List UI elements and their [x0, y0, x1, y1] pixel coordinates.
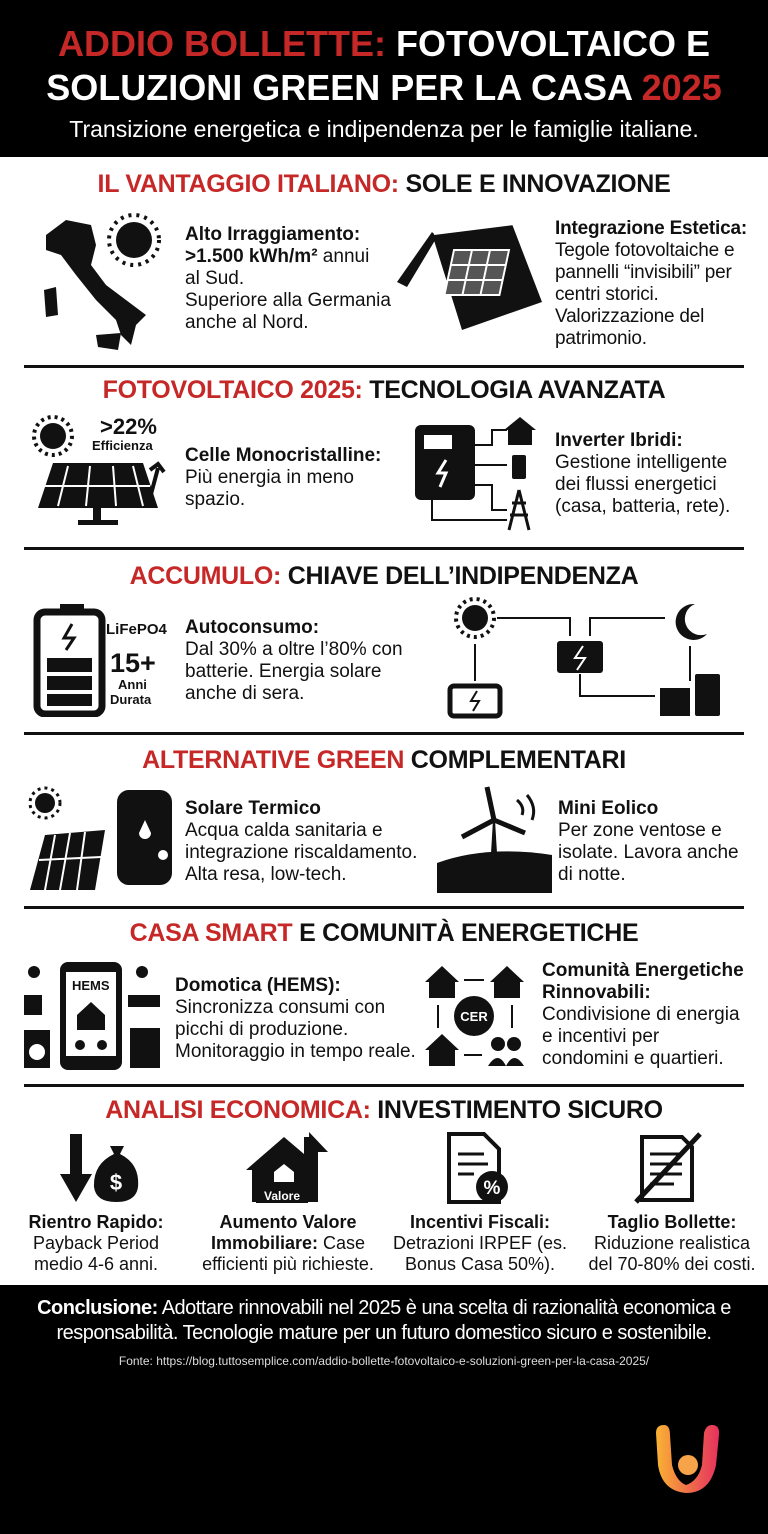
- text: comunita energetiche: Condivisione di energia: [542, 1004, 740, 1025]
- text: inverter ibridi: (casa, batteria, rete).: [555, 496, 730, 517]
- text: autoconsumo: Dal 30% a oltre l’80% con: [185, 639, 403, 660]
- text: integrazione estetica: patrimonio.: [555, 328, 647, 349]
- economic item: valore immobiliare: [202, 1132, 374, 1274]
- text: del 70-80% dei costi.: [588, 1254, 756, 1274]
- text: inverter ibridi: dei flussi energetici: [555, 474, 717, 495]
- logo: [656, 1425, 720, 1493]
- economic item: incentivi fiscali: [393, 1132, 567, 1274]
- text: [202, 1212, 374, 1274]
- text: comunita energetiche: [542, 960, 744, 1069]
- text: Immobiliare: Case: [211, 1233, 365, 1253]
- text: Detrazioni IRPEF (es.: [393, 1233, 567, 1253]
- header: [0, 0, 768, 157]
- icon: solar panel efficiency: >22%: [100, 414, 157, 439]
- icon: house value: [246, 1132, 328, 1203]
- text: comunita energetiche: e incentivi per: [542, 1026, 659, 1047]
- title: ADDIO BOLLETTE: FOTOVOLTAICO E: [58, 23, 710, 64]
- economic item: taglio bollette: [588, 1132, 756, 1274]
- economic item: rientro rapido: [28, 1134, 164, 1274]
- conclusion text: Conclusione: Adottare rinnovabili nel 2025 è una scelta di razionalità economica e responsabilità. Tecnologie mature per un futuro domestico sicuro e sostenibile.: [37, 1297, 731, 1344]
- text: mini eolico: [558, 798, 739, 885]
- icon: smart home phone: HEMS: [72, 978, 110, 993]
- text: domotica: Sincronizza consumi con: [175, 997, 385, 1018]
- icon: smart home phone: [24, 962, 160, 1070]
- text: integrazione estetica: [555, 218, 747, 349]
- icon: CER community: [425, 966, 524, 1066]
- icon: solar thermal: [28, 786, 172, 890]
- text: integrazione estetica: Integrazione Estetica:: [555, 218, 747, 239]
- icon: document percent: [447, 1132, 508, 1204]
- icon: crossed bill: [634, 1132, 702, 1204]
- icon: battery lifepo4: 15+: [110, 648, 156, 678]
- icon: house value: Valore: [264, 1189, 300, 1203]
- text: Taglio Bollette:: [608, 1212, 736, 1232]
- icon: CER community: CER: [460, 1009, 488, 1024]
- text: autoconsumo: Autoconsumo:: [185, 617, 319, 638]
- text: autoconsumo: [185, 617, 403, 704]
- text: celle monocristalline: spazio.: [185, 489, 245, 510]
- text: comunita energetiche: Rinnovabili:: [542, 982, 651, 1003]
- text: celle monocristalline: [185, 445, 381, 510]
- icon: wind turbine: [437, 786, 552, 893]
- text: alto irraggiamento: Superiore alla Germania: [185, 290, 391, 311]
- text: integrazione estetica: centri storici.: [555, 284, 659, 305]
- icon: battery lifepo4: Anni: [118, 677, 147, 692]
- text: inverter ibridi: [555, 430, 730, 517]
- icon: italy and sun: [44, 213, 161, 350]
- text: domotica: [175, 975, 416, 1062]
- source: Fonte: https://blog.tuttosemplice.com/addio-bollette-fotovoltaico-e-soluzioni-green-per-la-casa-2025/: [119, 1354, 649, 1368]
- title: SOLUZIONI GREEN PER LA CASA 2025: [46, 67, 722, 108]
- text: efficienti più richieste.: [202, 1254, 374, 1274]
- icon: battery lifepo4: LiFePO4: [106, 621, 168, 638]
- text: inverter ibridi: Gestione intelligente: [555, 452, 727, 473]
- text: [588, 1212, 756, 1274]
- text: alto irraggiamento: anche al Nord.: [185, 312, 309, 333]
- icon: arrow down money bag: [60, 1134, 138, 1202]
- text: solare termico: Alta resa, low-tech.: [185, 864, 347, 885]
- text: domotica: Monitoraggio in tempo reale.: [175, 1041, 416, 1062]
- text: alto irraggiamento: >1.500 kWh/m² annui: [185, 246, 369, 267]
- text: inverter ibridi: Inverter Ibridi:: [555, 430, 683, 451]
- text: alto irraggiamento: al Sud.: [185, 268, 244, 289]
- text: Incentivi Fiscali:: [410, 1212, 550, 1232]
- text: Payback Period: [33, 1233, 159, 1253]
- text: medio 4-6 anni.: [34, 1254, 158, 1274]
- section 3 heading: ACCUMULO: CHIAVE DELL’INDIPENDENZA: [130, 562, 638, 590]
- text: [28, 1212, 164, 1274]
- text: domotica: picchi di produzione.: [175, 1019, 348, 1040]
- text: Riduzione realistica: [594, 1233, 750, 1253]
- text: domotica: Domotica (HEMS):: [175, 975, 341, 996]
- text: integrazione estetica: Valorizzazione del: [555, 306, 704, 327]
- icon: roof tiles: [397, 225, 542, 330]
- text: comunita energetiche: condomini e quartieri.: [542, 1048, 724, 1069]
- icon: arrow down money bag: $: [110, 1170, 122, 1195]
- text: solare termico: integrazione riscaldamento.: [185, 842, 417, 863]
- icon: battery lifepo4: Durata: [110, 692, 152, 707]
- text: celle monocristalline: Celle Monocristalline:: [185, 445, 381, 466]
- text: solare termico: Acqua calda sanitaria e: [185, 820, 383, 841]
- text: [393, 1212, 567, 1274]
- section 6 heading: ANALISI ECONOMICA: INVESTIMENTO SICURO: [105, 1096, 663, 1124]
- text: autoconsumo: anche di sera.: [185, 683, 304, 704]
- icon: battery lifepo4: [34, 604, 168, 717]
- text: integrazione estetica: Tegole fotovoltaiche e: [555, 240, 734, 261]
- section 5 heading: CASA SMART E COMUNITÀ ENERGETICHE: [130, 919, 638, 947]
- text: autoconsumo: batterie. Energia solare: [185, 661, 381, 682]
- icon: document percent: %: [484, 1178, 501, 1199]
- text: solare termico: Solare Termico: [185, 798, 321, 819]
- text: mini eolico: di notte.: [558, 864, 626, 885]
- text: comunita energetiche: Comunità Energetiche: [542, 960, 744, 981]
- section 2 heading: FOTOVOLTAICO 2025: TECNOLOGIA AVANZATA: [103, 376, 665, 404]
- icon: solar panel efficiency: Efficienza: [92, 438, 153, 453]
- icon: energy flow diagram: [448, 597, 720, 718]
- text: solare termico: [185, 798, 417, 885]
- icon: hybrid inverter: [415, 417, 536, 530]
- title: [46, 23, 722, 108]
- text: Aumento Valore: [219, 1212, 357, 1232]
- text: alto irraggiamento: [185, 224, 391, 333]
- text: alto irraggiamento: Alto Irraggiamento:: [185, 224, 360, 245]
- icon: solar panel efficiency: [32, 414, 166, 525]
- text: Bonus Casa 50%).: [405, 1254, 555, 1274]
- text: Rientro Rapido:: [28, 1212, 164, 1232]
- section 4 heading: ALTERNATIVE GREEN COMPLEMENTARI: [142, 746, 626, 774]
- text: mini eolico: isolate. Lavora anche: [558, 842, 739, 863]
- section 1 heading: IL VANTAGGIO ITALIANO: SOLE E INNOVAZIONE: [98, 170, 670, 198]
- subtitle: Transizione energetica e indipendenza per le famiglie italiane.: [69, 116, 699, 142]
- footer: [0, 1285, 768, 1534]
- text: celle monocristalline: Più energia in meno: [185, 467, 354, 488]
- text: integrazione estetica: pannelli “invisibili” per: [555, 262, 732, 283]
- text: mini eolico: Per zone ventose e: [558, 820, 722, 841]
- text: mini eolico: Mini Eolico: [558, 798, 658, 819]
